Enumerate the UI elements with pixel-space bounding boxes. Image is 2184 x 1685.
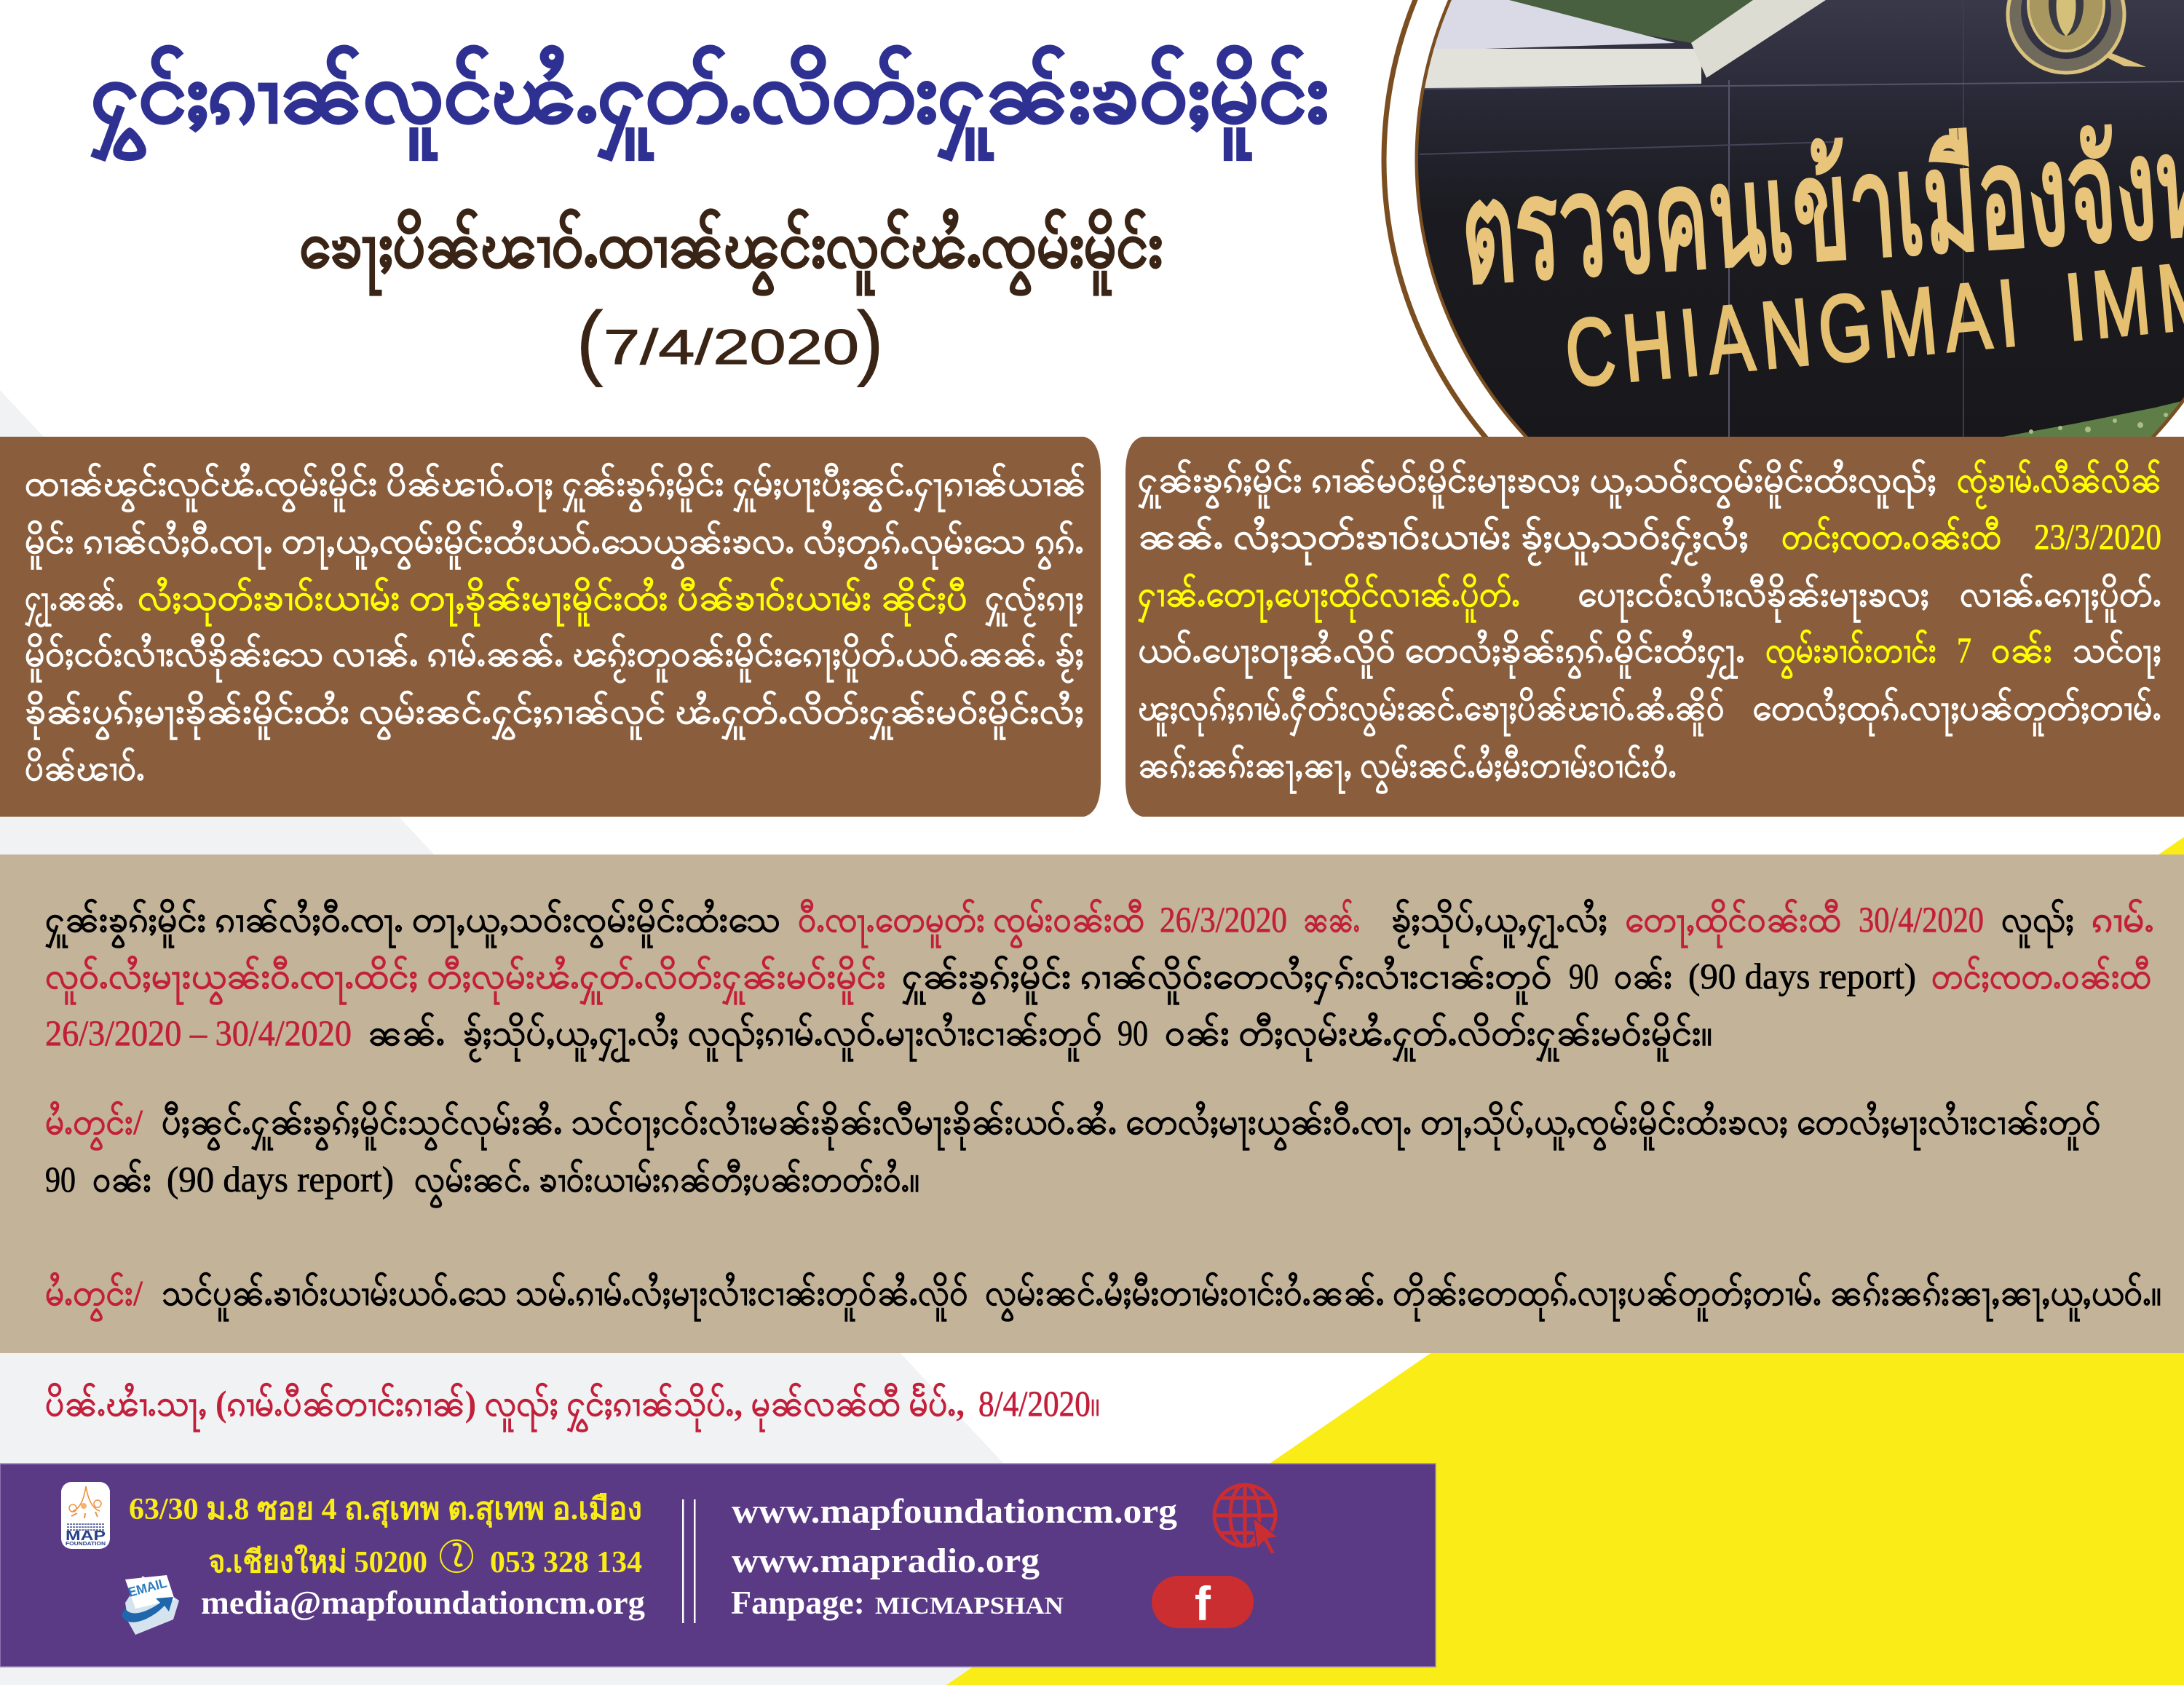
panel: beige main notice: 90 — [1117, 1012, 1148, 1053]
panel: left brown notice: ထၢၼ်ၽွင်းလူင်ၽႆႉၸွမ်းမိူင်း ပိၼ်ၽၢဝ်ႉဝႃႈ ႁူၼ်းၶွၵ်ႈမိူင်း ႁူမ်ႈပႃးပီႈၼွင်ႉႁႃၵၢၼ်ယၢၼ် — [25, 461, 1086, 513]
panel: left brown notice — [0, 437, 1101, 817]
fanpage: MICMAPSHAN — [875, 1593, 1064, 1619]
phone number: 053 328 134 — [490, 1546, 642, 1579]
panel: right brown notice: ၽူႈလုၵ်ႈၵၢမ်ႉႁဵတ်းလွမ်းၼင်ႉၶေႃႈပိၼ်ၽၢဝ်ႉၼႆႉၼိူဝ် — [1138, 686, 1725, 737]
panel: beige main notice: 90 — [45, 1159, 76, 1200]
red date 26/3/2020: 26/3/2020 — [1160, 899, 1287, 940]
address line 1: 63/30 ม.8 ซอย 4 ถ.สุเทพ ต.สุเทพ อ.เมือง — [129, 1492, 642, 1528]
panel: beige main notice: တေႃႇထိုင်ဝၼ်းထီ — [1625, 897, 1841, 949]
icon: email: EMAIL — [127, 1576, 168, 1600]
panel: beige main notice: ၶႂ်ႈသိုပ်ႇယူႇႁႂႃႉလႆႈ — [1391, 897, 1607, 949]
panel: right brown notice: တင်ႈၸတႉဝၼ်းထီ — [1781, 515, 2001, 557]
panel: beige main notice: ဝၼ်း — [1614, 954, 1672, 996]
sign text: English — [1568, 263, 2184, 386]
immigration seal — [2008, 0, 2146, 73]
fanpage — [731, 1584, 1064, 1621]
website 2: www.mapradio.org — [732, 1542, 1040, 1580]
panel: left brown notice: ပိၼ်ၽၢဝ်ႉ — [25, 746, 145, 788]
panel: beige main notice: ၼၼ်ႉ ၶႂ်ႈသိုပ်ႇယူႇႁႂႃႉလႆႈ လူၺ်ႈၵၢမ်ႉလူဝ်ႉမႃးလၢႆးငၢၼ်းတူဝ် — [368, 1011, 1102, 1063]
panel: right brown notice: တေလႆႈထုၵ်ႉလႃႈပၼ်တူတ်ႈတၢမ်ႉ — [1752, 686, 2161, 737]
address line 2: จ.เชียงใหม่ 50200 — [208, 1544, 427, 1579]
panel: beige main notice — [0, 855, 2184, 1353]
icon: globe with cursor — [1214, 1485, 1278, 1555]
icon: MAP Foundation logo — [61, 1482, 110, 1549]
photo: Chiang Mai immigration sign — [1382, 0, 2184, 437]
panel: right brown notice: ႁူၼ်းၶွၵ်ႈမိူင်း ၵၢၼ်မဝ်းမိူင်းမႃးၶလႈ ယူႇသဝ်းၸွမ်းမိူင်းထႆးလူၺ်ႈ — [1138, 458, 1936, 510]
panel: beige main notice: ဝၼ်း တီႈလုမ်းၽႆႉႁူတ်ႉလိတ်းႁူၼ်းမဝ်းမိူင်း။ — [1165, 1011, 1712, 1063]
panel: right brown notice: ႁၢၼ်ႉတေႃႇပေႃးထိုင်လၢၼ်ႉပိူတ်ႉ — [1138, 572, 1520, 624]
second remark: မႆႉတွင်း/ — [45, 1271, 143, 1323]
panel: left brown notice: မိူဝ်ႈငဝ်းလၢႆးလီၶိုၼ်းသေ လၢၼ်ႉ ၵၢမ်ႉၼၼ်ႉ ၽၵႂ်းတူဝၼ်းမိူင်းၵေႃႈပိူတ်ႉယဝ်ႉၼၼ်ႉ ၶႂ်ႈ — [25, 632, 1084, 683]
panel: beige main notice: 90 — [1569, 956, 1599, 996]
panel: right brown notice: သင်ဝႃႈ — [2073, 628, 2161, 680]
panel: beige main notice: ဝီႉၸႃႉတေမူတ်း ၸွမ်းဝၼ်းထီ — [798, 897, 1144, 949]
background: yellow triangle — [946, 837, 2184, 1685]
icon: facebook — [1152, 1576, 1254, 1630]
icon: facebook: f — [1195, 1577, 1211, 1630]
photo outer ring — [1384, 0, 2184, 600]
icon: MAP Foundation logo: MAP — [66, 1529, 106, 1543]
first remark: မႆႉတွင်း/ — [45, 1100, 143, 1151]
panel: right brown notice: လၢၼ်ႉၵေႃႈပိူတ်ႉ — [1960, 572, 2161, 624]
red date range: 26/3/2020 – 30/4/2020 — [45, 1012, 352, 1053]
panel: beige main notice: တင်ႈၸတႉဝၼ်းထီ — [1931, 954, 2151, 996]
panel: beige main notice: လူဝ်ႉလႆႈမႃးယွၼ်းဝီႉၸႃႉထိင်ႈ တီႈလုမ်းၽႆႉႁူတ်ႉလိတ်းႁူၼ်းမဝ်းမိူင်း — [45, 954, 886, 1006]
highlighted 7 days: 7 — [1957, 630, 1971, 670]
sign text: English: CHIANGMAI — [1561, 259, 2030, 408]
date: 7/4/2020 — [604, 320, 859, 375]
panel: beige main notice: ၵၢမ်ႉ — [2092, 897, 2154, 940]
panel: left brown notice: ႁူလႂ်းၵႃႈ — [985, 576, 1084, 627]
90 days report: (90 days report) — [1688, 956, 1916, 996]
fanpage: Fanpage: — [731, 1584, 865, 1621]
email address: media@mapfoundationcm.org — [201, 1584, 645, 1621]
panel: beige main notice: လူၺ်ႈ — [2001, 897, 2074, 949]
panel: beige main notice: ၼၼ်ႉ — [1303, 897, 1360, 940]
panel: right brown notice: ၸွမ်းၶၢဝ်းတၢင်း — [1765, 628, 1936, 680]
panel: right brown notice: ၼၼ်ႉ လႆႈသုတ်းၶၢဝ်းယၢမ်း ၶႂ်ႈယူႇသဝ်းႁႂ်ႈလႆႈ — [1138, 515, 1749, 566]
credit line: ပိၼ်ႉၽၢႆႉသႃႇ (ၵၢမ်ႉပီၼ်တၢင်းၵၢၼ်) လူၺ်ႈ ႁွင်ႈၵၢၼ်သိုပ်ႉ, မုၼ်လၼ်ထီ မႅပ်ႉ, — [45, 1381, 965, 1433]
panel: beige main notice: ႁူၼ်းၶွၵ်ႈမိူင်း ၵၢၼ်လႆႈဝီႉၸႃႉ တႃႇယူႇသဝ်းၸွမ်းမိူင်းထႆးသေ — [45, 897, 780, 949]
panel: right brown notice: ပေႃးငဝ်းလၢႆးလီၶိုၼ်းမႃးၶလႈ — [1578, 572, 1929, 624]
panel: left brown notice: ႁႂႃႉၼၼ်ႉ — [25, 576, 124, 627]
date: ( — [576, 295, 604, 388]
panel: beige main notice: ပီႈၼွင်ႉႁူၼ်းၶွၵ်ႈမိူင်းသွင်လုမ်းၼႆႉ သင်ဝႃႈငဝ်းလၢႆးမၼ်းၶိုၼ်းလီမႃးၶိုၼ်းယဝ်ႉၼႆႉ တေလႆႈမႃးယွၼ်းဝီႉၸႃႉ တႃႇသိုပ်ႇယူႇၸွမ်းမိူင်းထႆးၶလႈ တေလႆႈမႃးလၢႆးငၢၼ်းတူဝ် — [162, 1100, 2101, 1151]
icon: MAP Foundation logo: FOUNDATION — [66, 1542, 106, 1547]
credit line: 8/4/2020။ — [978, 1383, 1100, 1424]
panel: right brown notice: ယဝ်ႉပေႃးဝႃႈၼႆႉလိူဝ် တေလႆႈၶိုၼ်းၵွၵ်ႉမိူင်းထႆးႁႂႃႉ — [1138, 628, 1745, 680]
icon: phone — [440, 1540, 472, 1572]
panel: beige main notice: (90 days report) — [167, 1159, 394, 1200]
panel: right brown notice: ဝၼ်း — [1991, 628, 2052, 670]
date — [576, 295, 884, 388]
background: grey arrow shape — [0, 390, 1107, 1685]
panel: left brown notice: မိူင်း ၵၢၼ်လႆႈဝီႉၸႃႉ တႃႇယူႇၸွမ်းမိူင်းထႆးယဝ်ႉသေယွၼ်းၶလႉ လႆႈတွၵ်ႉလုမ်းသေ ၵွၵ်ႉ — [25, 519, 1084, 571]
panel: beige main notice: ဝၼ်း — [92, 1157, 151, 1200]
red date 30/4/2020: 30/4/2020 — [1859, 899, 1984, 940]
panel: right brown notice — [1125, 437, 2184, 817]
panel: beige main notice: လွမ်းၼင်ႉ ၶၢဝ်းယၢမ်းၵၼ်တီႈပၼ်းတတ်းဝႆႉ။ — [414, 1157, 919, 1209]
website 1: www.mapfoundationcm.org — [732, 1492, 1177, 1531]
date: ) — [856, 295, 884, 388]
panel: left brown notice: ၶိုၼ်းပွၵ်ႈမႃးၶိုၼ်းမိူင်းထႆး လွမ်းၼင်ႉႁွင်ႈၵၢၼ်လူင် ၽႆႉႁူတ်ႉလိတ်းႁူၼ်းမဝ်းမိူင်းလႆႈ — [25, 689, 1084, 741]
footer: purple contact band — [0, 1464, 1436, 1667]
highlighted date 23/3/2020: 23/3/2020 — [2034, 516, 2161, 557]
highlighted sentence: လႆႈသုတ်းၶၢဝ်းယၢမ်း တႃႇၶိုၼ်းမႃးမိူင်းထႆး ပီၼ်ၶၢဝ်းယၢမ်း ၼိုင်ႈပီ — [138, 576, 968, 627]
subtitle: ၶေႃႈပိၼ်ၽၢဝ်ႉထၢၼ်ၽွင်းလူင်ၽႆႉၸွမ်းမိူင်း — [299, 207, 1163, 296]
panel: right brown notice: ၼၵ်းၼၵ်းၼႃႇၼႃႇ လွမ်းၼင်ႉမႆႈမီးတၢမ်းဝၢင်းဝႆႉ — [1138, 743, 1677, 795]
icon: email — [122, 1575, 179, 1635]
title: ႁွင်ႈၵၢၼ်လူင်ၽႆႉႁူတ်ႉလိတ်းႁူၼ်းၶဝ်ႈမိူင်း — [91, 45, 1329, 161]
panel: beige main notice: ႁူၼ်းၶွၵ်ႈမိူင်း ၵၢၼ်လိူဝ်းတေလႆႈႁၵ်းလၢႆးငၢၼ်းတူဝ် — [902, 954, 1552, 1006]
